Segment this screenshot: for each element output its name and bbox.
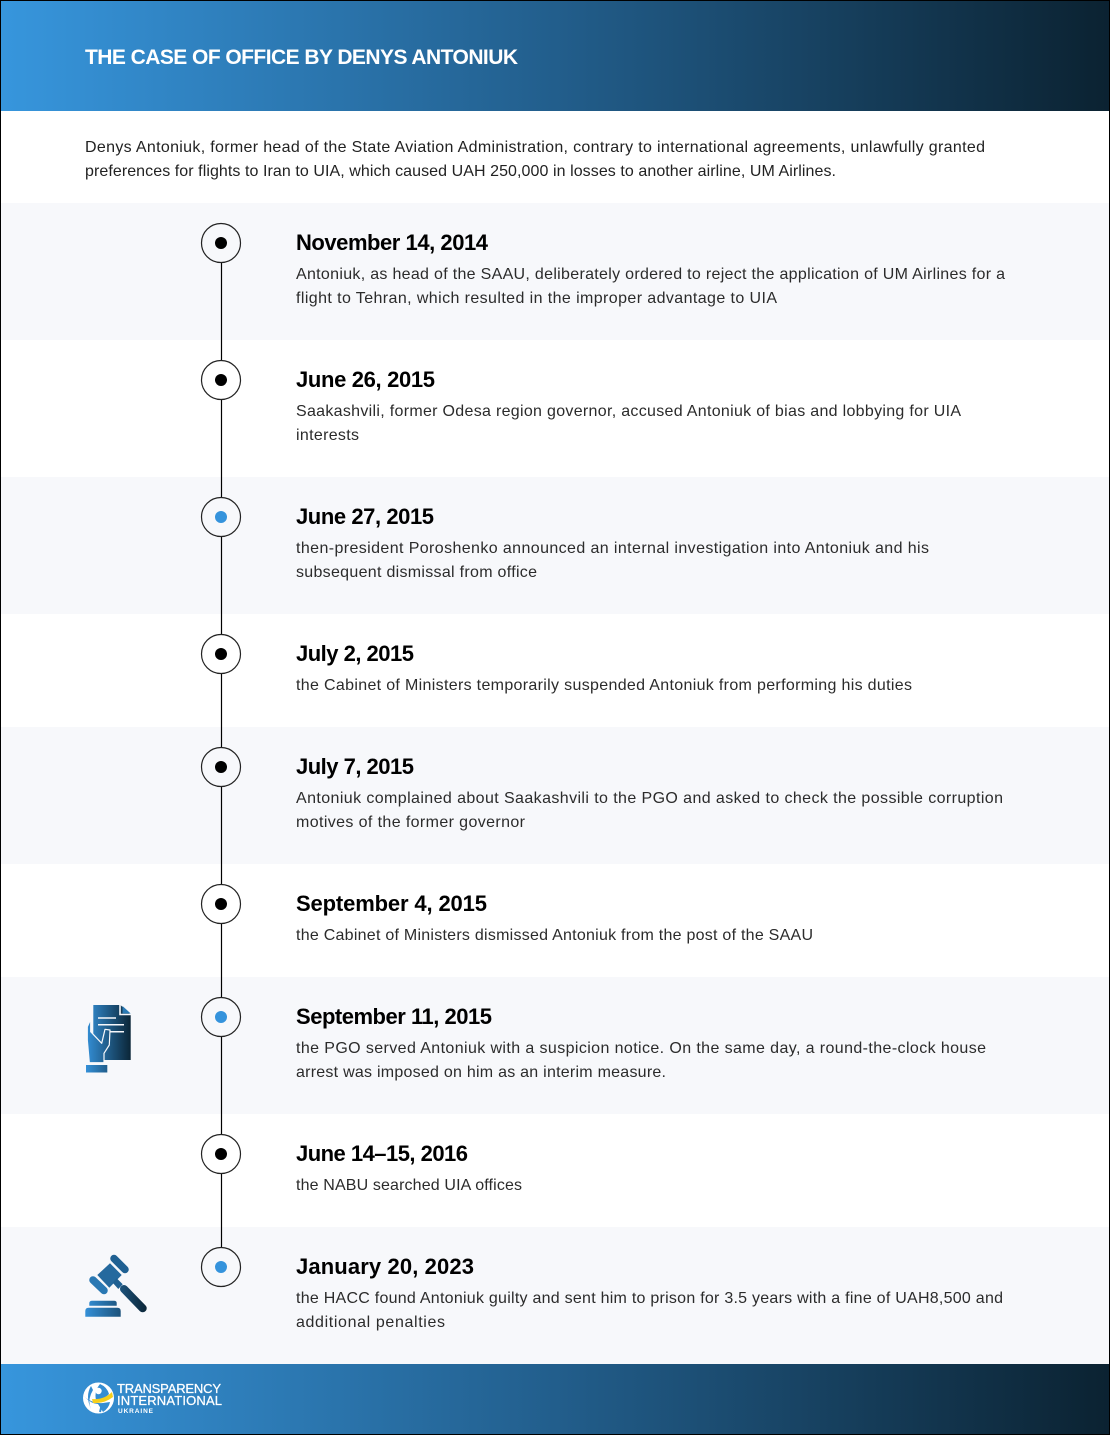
event: June 14–15, 2016: June 14–15, 2016 bbox=[296, 1141, 468, 1166]
event: June 14–15, 2016 bbox=[202, 1134, 522, 1194]
logo: TRANSPARENCY bbox=[117, 1381, 221, 1396]
event: June 26, 2015 bbox=[202, 360, 961, 444]
icon: hand holding document bbox=[86, 1004, 132, 1072]
event: July 2, 2015: July 2, 2015 bbox=[296, 641, 414, 666]
event: July 2, 2015 bbox=[202, 634, 912, 694]
event: June 27, 2015 bbox=[202, 498, 929, 581]
event: September 11, 2015 bbox=[202, 998, 986, 1081]
event: September 11, 2015: the PGO served Antoniuk with a suspicion notice. On the same day, a round-the-clock house bbox=[296, 1040, 986, 1057]
event: November 14, 2014: Antoniuk, as head of the SAAU, deliberately ordered to reject the application of UM Airlines for a bbox=[296, 266, 1005, 283]
event: September 4, 2015: the Cabinet of Ministers dismissed Antoniuk from the post of the SAAU bbox=[296, 927, 813, 944]
event: September 4, 2015 bbox=[202, 884, 813, 944]
event: November 14, 2014 bbox=[202, 224, 1005, 307]
logo: UKRAINE bbox=[118, 1408, 154, 1415]
intro text: preferences for flights to Iran to UIA, which caused UAH 250,000 in losses to another airline, UM Airlines. bbox=[85, 163, 836, 180]
event: January 20, 2023: additional penalties bbox=[296, 1314, 445, 1331]
event: November 14, 2014: November 14, 2014 bbox=[296, 230, 489, 255]
event: June 26, 2015: interests bbox=[296, 427, 359, 444]
event: January 20, 2023: the HACC found Antoniuk guilty and sent him to prison for 3.5 years with a fine of UAH8,500 and bbox=[296, 1290, 1003, 1307]
event: June 27, 2015: subsequent dismissal from office bbox=[296, 564, 537, 581]
event: July 7, 2015: July 7, 2015 bbox=[296, 754, 414, 779]
event: July 7, 2015: Antoniuk complained about Saakashvili to the PGO and asked to check the possible corruption bbox=[296, 790, 1003, 807]
timeline axis bbox=[220, 243, 222, 1267]
intro text bbox=[85, 139, 985, 180]
event: July 7, 2015 bbox=[202, 748, 1003, 831]
footer banner bbox=[0, 1364, 1110, 1435]
event: July 7, 2015: motives of the former governor bbox=[296, 814, 526, 831]
header banner bbox=[0, 0, 1110, 111]
event: September 11, 2015: arrest was imposed on him as an interim measure. bbox=[296, 1064, 666, 1081]
event: June 26, 2015: Saakashvili, former Odesa region governor, accused Antoniuk of bias and lobbying for UIA bbox=[296, 403, 961, 420]
intro text: Denys Antoniuk, former head of the State Aviation Administration, contrary to international agreements, unlawfully granted bbox=[85, 139, 985, 156]
event: June 26, 2015: June 26, 2015 bbox=[296, 367, 435, 392]
logo: INTERNATIONAL bbox=[117, 1393, 222, 1408]
logo bbox=[83, 1381, 222, 1415]
event: June 27, 2015: June 27, 2015 bbox=[296, 504, 434, 529]
event: June 14–15, 2016: the NABU searched UIA offices bbox=[296, 1177, 522, 1194]
icon: judge gavel bbox=[85, 1258, 143, 1317]
event: November 14, 2014: flight to Tehran, which resulted in the improper advantage to UIA bbox=[296, 290, 777, 307]
event: September 11, 2015: September 11, 2015 bbox=[296, 1004, 492, 1029]
event: January 20, 2023 bbox=[202, 1248, 1003, 1331]
event: June 27, 2015: then-president Poroshenko announced an internal investigation into Antoniuk and his bbox=[296, 540, 929, 557]
event: January 20, 2023: January 20, 2023 bbox=[296, 1254, 474, 1279]
title: THE CASE OF OFFICE BY DENYS ANTONIUK bbox=[85, 46, 518, 69]
event: September 4, 2015: September 4, 2015 bbox=[296, 891, 487, 916]
event: July 2, 2015: the Cabinet of Ministers temporarily suspended Antoniuk from performing his duties bbox=[296, 677, 912, 694]
